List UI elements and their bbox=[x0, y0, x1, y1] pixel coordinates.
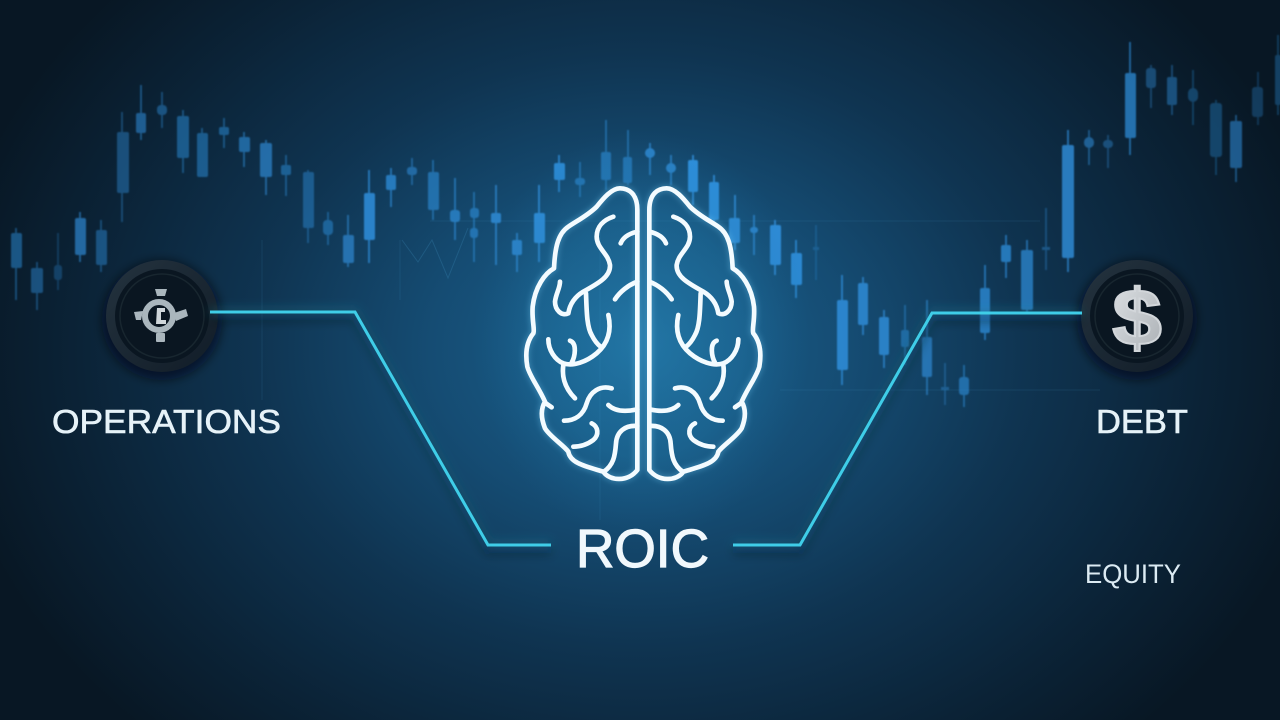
connector line: debt to ROIC bbox=[733, 313, 1082, 550]
faint grid lines and ghost chart bbox=[262, 220, 1100, 520]
candlestick chart: centre section bbox=[554, 120, 819, 298]
label: equity: EQUITY bbox=[1085, 559, 1181, 589]
icon: brain bbox=[526, 188, 760, 479]
central glow behind brain bbox=[472, 130, 812, 540]
brain left hemisphere bbox=[526, 188, 637, 479]
dollar sign glyph: $ bbox=[1112, 272, 1162, 362]
label: debt: DEBT bbox=[1096, 403, 1188, 440]
connector line: operations to ROIC bbox=[210, 312, 551, 550]
candlestick chart: left section bbox=[11, 85, 545, 310]
candlestick chart: right section bbox=[837, 35, 1280, 407]
brain right hemisphere bbox=[649, 188, 760, 479]
operations gear glyph bbox=[134, 289, 188, 342]
brain glow bbox=[526, 188, 760, 479]
label: operations: OPERATIONS bbox=[52, 403, 281, 440]
icon: operations gear badge bbox=[102, 260, 222, 380]
title: ROIC: ROIC bbox=[576, 519, 709, 579]
icon: debt dollar badge bbox=[1077, 260, 1197, 380]
